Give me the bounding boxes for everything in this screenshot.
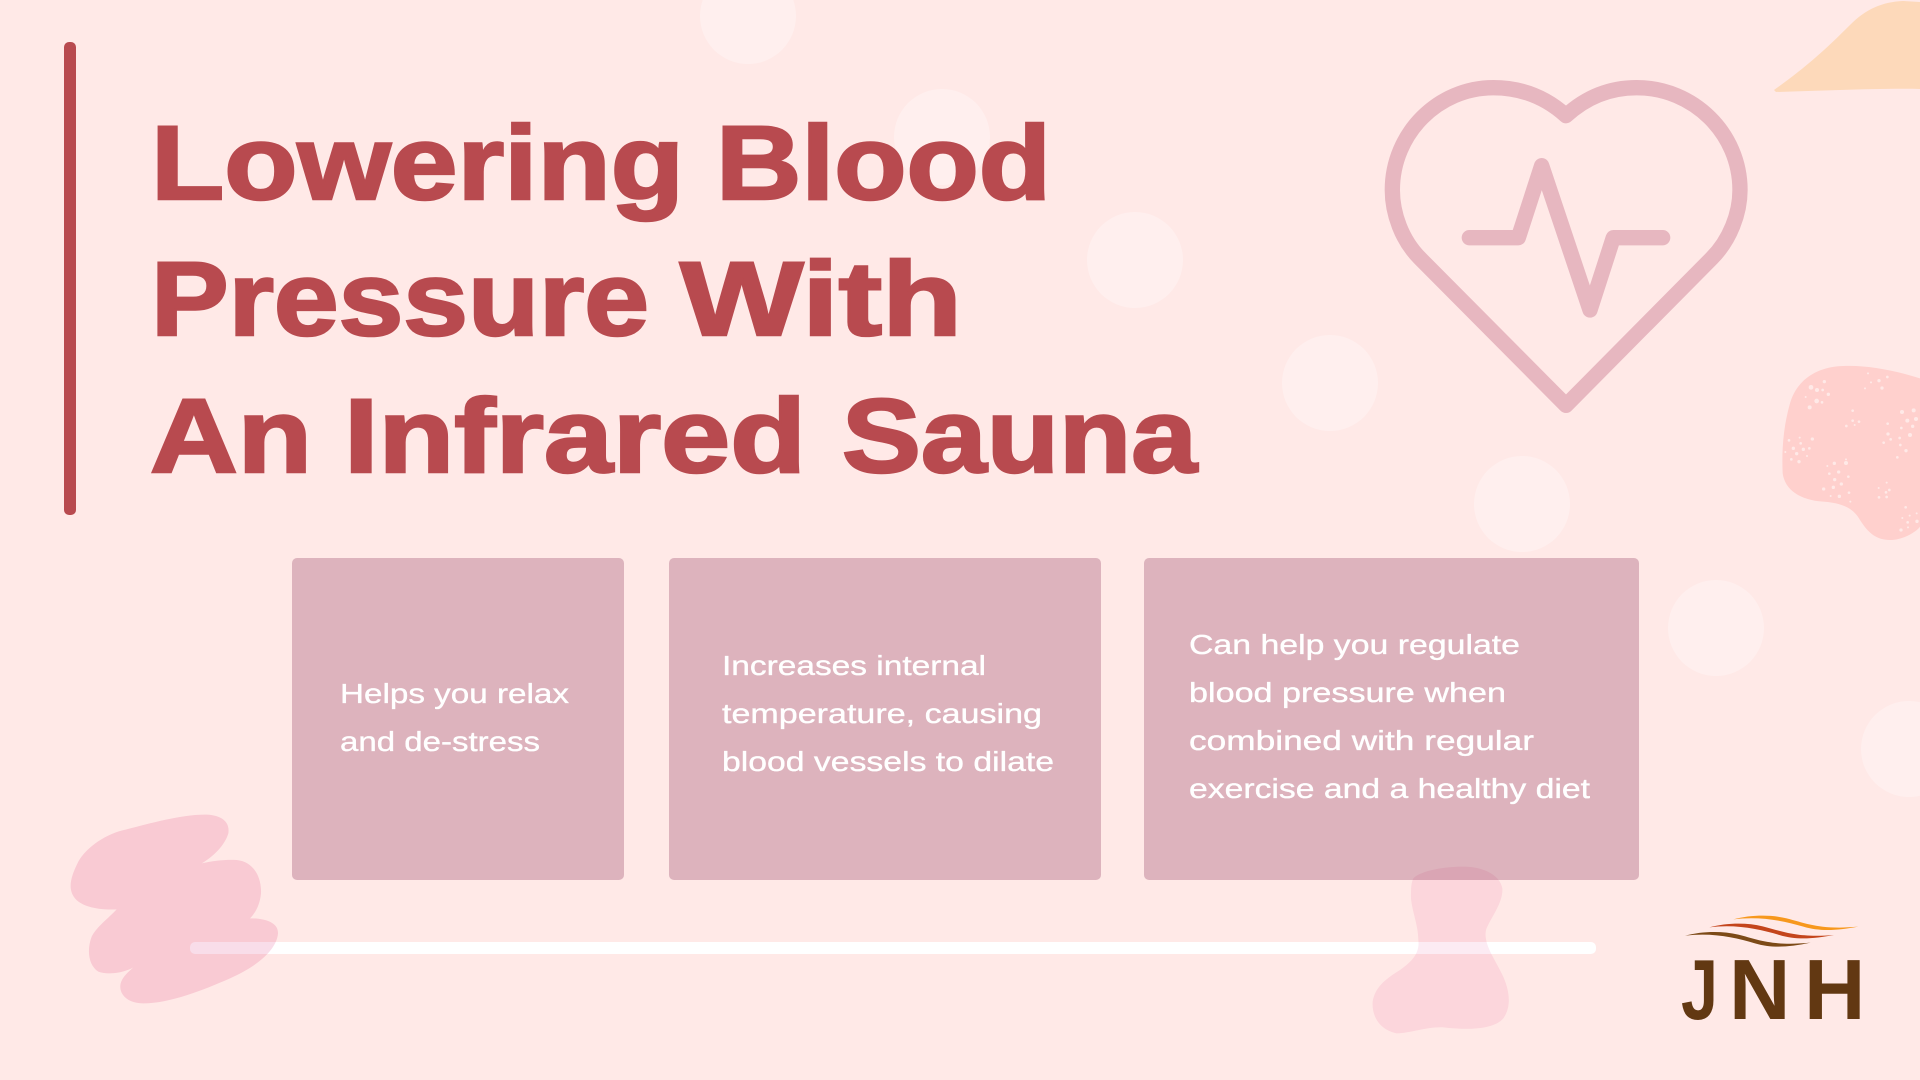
card 2 text [722,650,1054,777]
white timeline bar [190,942,1596,954]
card 2 text: blood vessels to dilate [722,746,1054,777]
heart pulse icon [1392,88,1740,405]
card 3 text: combined with regular [1189,725,1534,756]
title accent bar [64,42,76,515]
card 2 [669,558,1101,880]
logo lettering: N [1729,943,1790,1038]
decorative orange blob top right [1774,1,1920,92]
card 3 [1144,558,1639,880]
logo lettering: J [1681,943,1718,1038]
title: Infrared [344,378,806,495]
title [150,105,1199,495]
card 3 text: exercise and a healthy diet [1189,773,1590,804]
decorative translucent circles [700,0,1920,797]
card 3 text: blood pressure when [1189,677,1506,708]
title: Sauna [842,378,1199,495]
title: Pressure [151,241,649,358]
JNH logo [1681,916,1865,1038]
card 1 text: and de-stress [340,726,540,757]
logo lettering: H [1804,943,1865,1038]
logo waves [1685,916,1858,947]
card 2 text: Increases internal [722,650,986,681]
card 1 text: Helps you relax [340,678,569,709]
card 3 text [1189,629,1590,804]
title: With [680,241,962,358]
title: Lowering [151,105,684,222]
heart outline [1392,88,1740,405]
pulse line [1469,166,1663,310]
title: Blood [716,105,1051,222]
card 1 text [340,678,569,757]
card 3 text: Can help you regulate [1189,629,1520,660]
decorative pink scribble blob bottom left [71,815,278,1003]
card 1 [292,558,624,880]
decorative speckled coral blob right [1782,366,1920,540]
title: An [150,378,312,495]
card 2 text: temperature, causing [722,698,1042,729]
decorative pink blob bottom centre [1373,867,1509,1033]
